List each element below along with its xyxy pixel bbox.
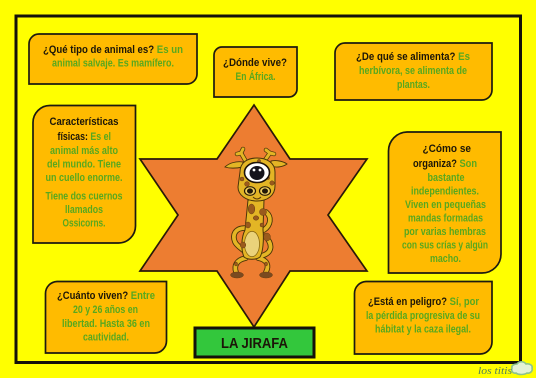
heading and text [223,57,287,83]
giraffe nostrils and mouth [244,187,270,199]
heading and text: físicas: Es el [58,131,111,143]
heading and text: Características [50,116,119,128]
heading and text: bastante [428,172,465,184]
panel: está en peligro [354,282,492,354]
panel: dónde vive [214,47,297,97]
heading and text: animal salvaje. Es mamífero. [52,58,174,70]
giraffe eye [244,162,270,182]
box [29,34,197,84]
icon: giraffe [225,149,287,278]
title [195,328,314,357]
panel: cómo se organiza [388,132,501,273]
heading and text: mandas formadas [408,212,483,224]
giraffe ears [225,161,287,168]
heading and text: ¿Cómo se [422,143,471,155]
box [214,47,297,97]
heading and text [402,143,488,265]
heading and text: del mundo. Tiene [47,158,121,170]
heading and text: animal más alto [50,145,118,157]
heading and text [356,51,470,91]
giraffe spots [234,204,270,266]
heading and text: Tiene dos cuernos [46,190,123,202]
heading and text: la pérdida progresiva de su [366,310,480,322]
heading and text: herbívora, se alimenta de [359,65,467,77]
heading and text: hábitat y la caza ilegal. [375,324,471,336]
title: LA JIRAFA [221,336,288,352]
box [354,282,492,354]
heading and text: ¿Dónde vive? [223,57,287,69]
giraffe feet [230,272,272,278]
logo emblem [512,362,532,374]
heading and text: Ossicorns. [62,218,106,230]
panel: características físicas [33,106,136,243]
box [33,106,136,243]
giraffe belly [244,231,260,257]
giraffe neck and body [242,200,264,259]
box [335,43,492,100]
heading and text: ¿Qué tipo de animal es? Es un [43,44,183,56]
heading and text: macho. [430,253,461,265]
heading and text: con sus crías y algún [402,240,488,252]
heading and text: por varias hembras [404,226,486,238]
panel: orange six-pointed star [140,105,367,327]
heading and text: 20 y 26 años en [73,304,138,316]
heading and text: cautividad. [83,332,129,344]
logo wordmark: los titis [478,365,512,377]
heading and text: libertad. Hasta 36 en [62,318,150,330]
heading and text [46,116,123,230]
heading and text: Viven en pequeñas [405,199,486,211]
heading and text: plantas. [397,79,430,91]
heading and text: organiza? Son [413,158,477,170]
heading and text: ¿Está en peligro? Sí, por [368,296,479,308]
heading and text [366,296,480,336]
heading and text: En África. [236,70,276,83]
logo: los titis [478,362,532,377]
heading and text: ¿Cuánto viven? Entre [57,290,155,302]
panel: qué tipo de animal [29,34,197,84]
heading and text: un cuello enorme. [46,172,123,184]
heading and text [57,290,155,344]
heading and text: independientes. [411,186,479,198]
panel: de qué se alimenta [335,43,492,100]
giraffe limbs [234,212,271,272]
heading and text [43,44,183,70]
heading and text: llamados [65,204,103,216]
giraffe head [238,158,275,201]
heading and text: ¿De qué se alimenta? Es [356,51,470,63]
panel: cuánto viven [45,282,166,353]
giraffe horns [237,149,274,160]
giraffe head spots [240,159,274,186]
box [388,132,501,273]
box [45,282,166,353]
